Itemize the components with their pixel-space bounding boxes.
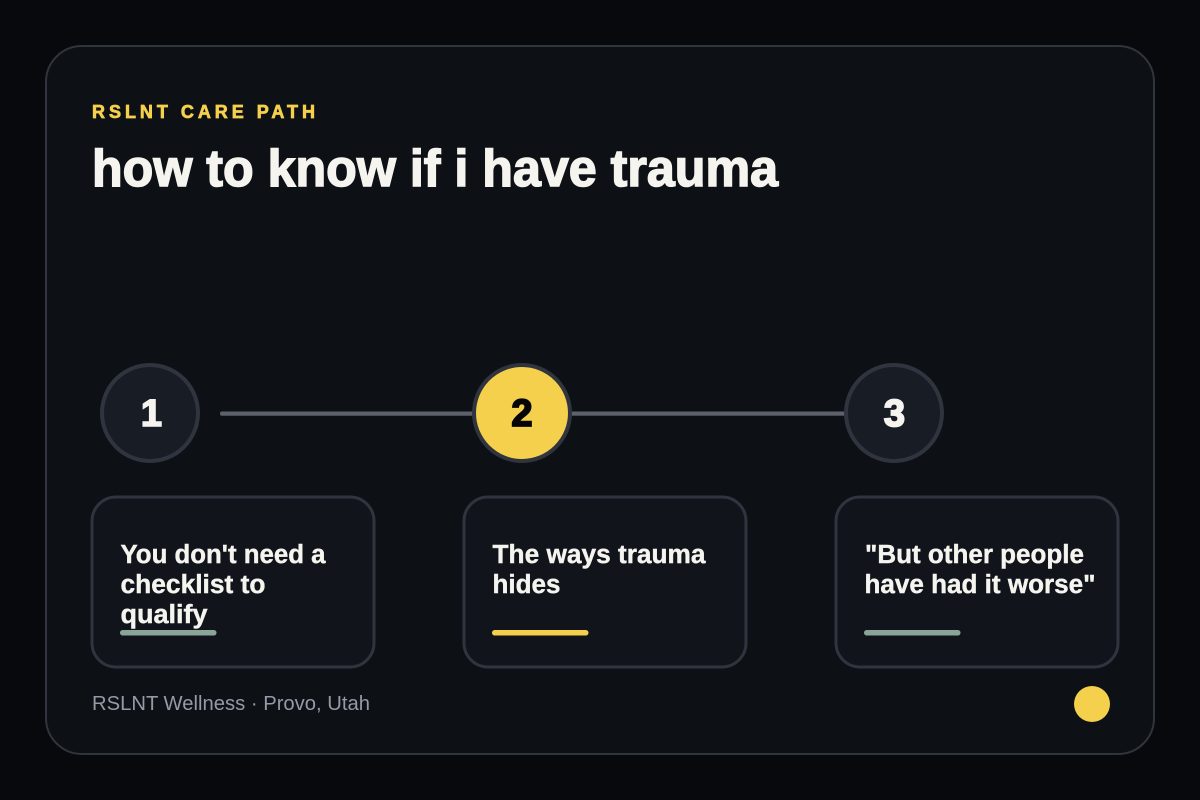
card 2 accent bar (492, 630, 588, 636)
step 2 marker (474, 365, 570, 461)
card 1 accent bar (120, 630, 216, 636)
card 2 text: The ways trauma (492, 541, 706, 569)
card 1 text: checklist to (120, 571, 266, 599)
card 2 text: hides (492, 571, 560, 599)
card 3 accent bar (864, 630, 960, 636)
card 3 text (864, 541, 1096, 599)
footer text: RSLNT Wellness · Provo, Utah (92, 693, 370, 715)
card 1 text: qualify (120, 601, 208, 629)
eyebrow label: RSLNT CARE PATH (92, 102, 315, 122)
step 3 marker (846, 365, 942, 461)
connector line: step 2 to step 3 (570, 412, 846, 416)
accent dot (1074, 686, 1110, 722)
step 3 marker: 3 (884, 393, 905, 435)
panel: step 2 card (464, 497, 746, 667)
step 1 marker: 1 (141, 393, 162, 435)
panel: step 3 card (836, 497, 1118, 667)
title: how to know if i have trauma (92, 140, 779, 198)
card 1 text (120, 541, 326, 629)
card 3 text: "But other people (865, 541, 1084, 569)
connector line: step 1 to step 2 (220, 412, 474, 416)
card 3 text: have had it worse" (864, 571, 1096, 599)
panel: step 1 card (92, 497, 374, 667)
card 1 text: You don't need a (120, 541, 326, 569)
step 2 marker: 2 (511, 393, 533, 435)
card 2 text (492, 541, 706, 599)
step 1 marker (102, 365, 198, 461)
